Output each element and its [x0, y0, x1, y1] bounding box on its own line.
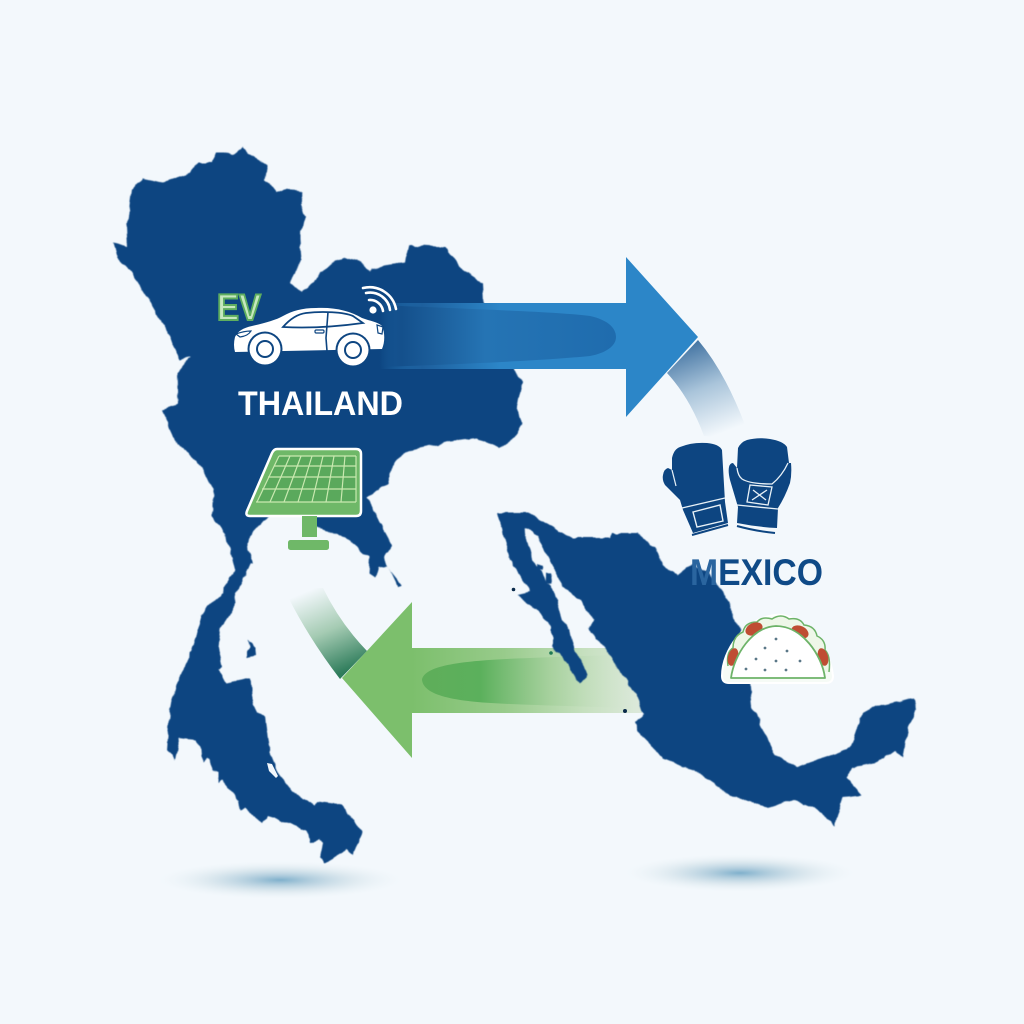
map: Gulf of California islands — [537, 564, 552, 583]
curved tail of blue arrow — [667, 340, 752, 440]
map: west coast inlet — [267, 763, 278, 778]
icon: solar panel — [246, 449, 361, 550]
curved tail of green arrow — [283, 588, 367, 679]
green arrow: Mexico to Thailand — [342, 602, 642, 758]
map: small offshore specks — [512, 588, 627, 713]
icon: right glove — [729, 438, 791, 533]
icon: EV badge: EV — [217, 287, 261, 328]
ground shadow: Thailand — [158, 861, 402, 899]
icon: boxing gloves — [663, 438, 791, 535]
map: Phuket-area island — [247, 640, 256, 657]
map: Mexico — [497, 513, 917, 825]
icon: electric car — [234, 308, 384, 368]
ground shadow: Mexico — [625, 854, 855, 892]
label: Mexico: MEXICO — [690, 552, 823, 593]
label: Thailand: THAILAND — [238, 385, 403, 423]
icon: left glove — [663, 443, 728, 535]
icon: wifi signal — [363, 287, 396, 314]
map: Thailand — [113, 147, 523, 863]
blue arrow: Thailand to Mexico — [378, 257, 698, 417]
icon: taco — [722, 615, 833, 683]
